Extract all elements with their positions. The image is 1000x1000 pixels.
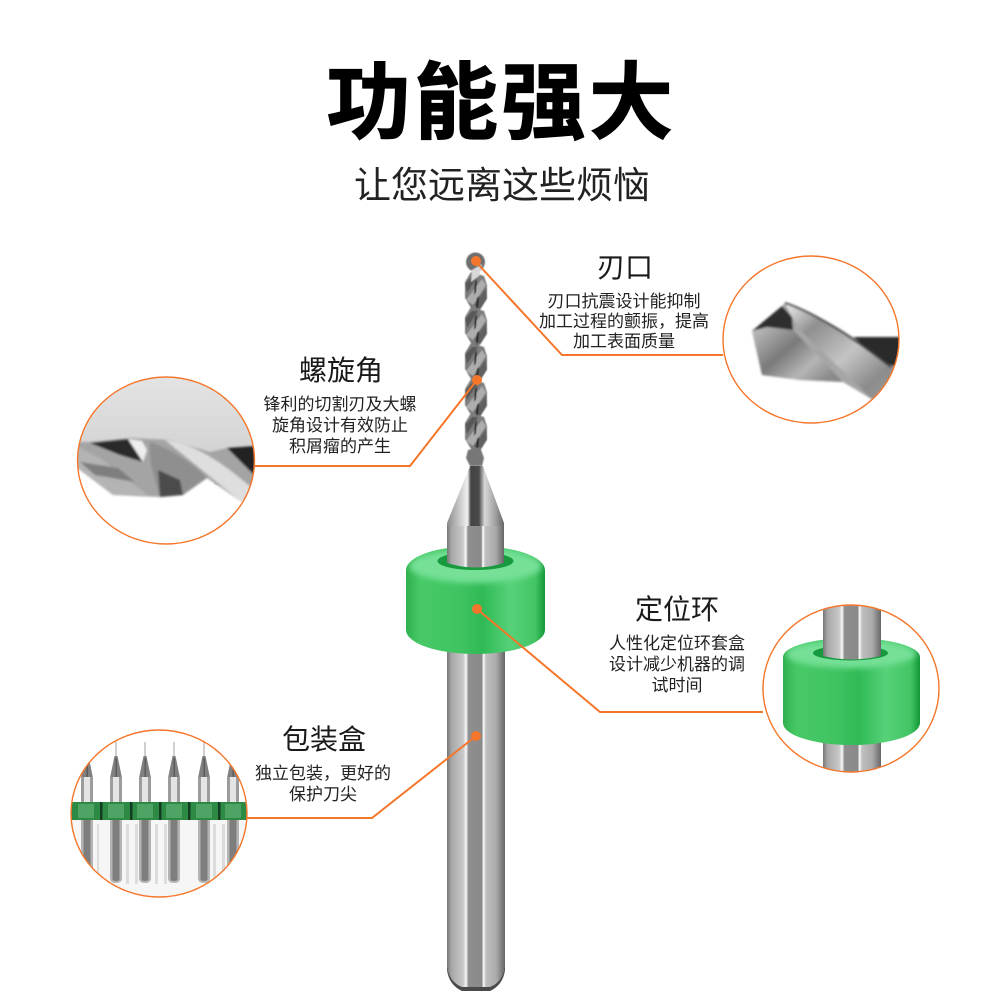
text block: locating ring: 定位环 <box>635 594 719 625</box>
text block: packaging box: 包装盒 <box>282 724 366 755</box>
title: 功能强大 <box>326 56 677 150</box>
text block: cutting edge <box>539 252 709 351</box>
drill cone <box>447 466 504 528</box>
text block: locating ring: 设计减少机器的调 <box>609 655 745 674</box>
lower shank bottom edge <box>447 966 505 991</box>
text block: helix angle: 旋角设计有效防止 <box>272 416 408 435</box>
text block: locating ring: 人性化定位环套盒 <box>609 634 745 653</box>
text block: packaging box: 保护刀尖 <box>289 785 357 804</box>
text block: locating ring: 试时间 <box>652 676 702 695</box>
detail circle: locating ring <box>763 595 939 780</box>
lower shank <box>447 645 505 991</box>
text block: helix angle: 螺旋角 <box>299 355 383 386</box>
drill bit <box>406 252 545 991</box>
detail circle: helix angle <box>76 375 256 544</box>
callout line: locating ring <box>472 604 763 712</box>
text block: helix angle: 锋利的切割刃及大螺 <box>264 395 416 414</box>
callout line: cutting edge <box>471 256 723 355</box>
upper shank <box>447 526 504 568</box>
text block: packaging box: 独立包装，更好的 <box>255 764 391 783</box>
text block: locating ring <box>609 594 745 695</box>
text block: cutting edge: 加工过程的颤振，提高 <box>539 312 709 331</box>
callout line: helix angle <box>255 375 482 466</box>
detail circle: packaging box <box>71 730 249 902</box>
drill flutes <box>465 252 487 466</box>
text block: packaging box <box>255 724 391 804</box>
text block: helix angle <box>264 355 416 456</box>
text block: helix angle: 积屑瘤的产生 <box>289 437 391 456</box>
text block: cutting edge: 刃口 <box>597 252 653 283</box>
green locating ring <box>406 546 545 654</box>
detail circle: cutting edge <box>723 256 900 423</box>
callout line: packaging box <box>247 731 481 818</box>
text block: cutting edge: 加工表面质量 <box>573 332 675 351</box>
text block: cutting edge: 刃口抗震设计能抑制 <box>548 292 700 311</box>
subtitle: 让您远离这些烦恼 <box>354 165 650 206</box>
